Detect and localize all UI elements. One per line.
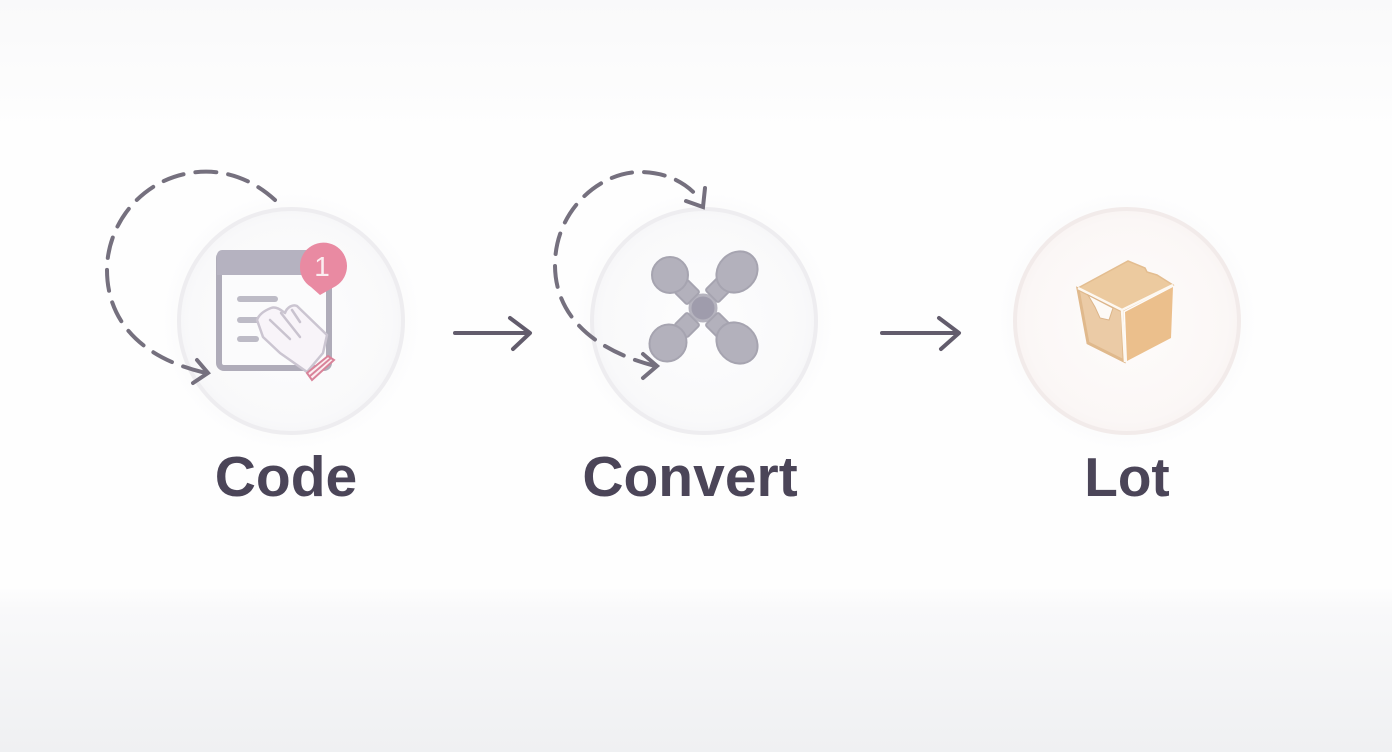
label: Lot: Lot [1084, 446, 1170, 508]
icon: cardboard box [1078, 261, 1173, 362]
icon: browser window [217, 250, 329, 368]
icon: notification badge [300, 243, 347, 295]
icon: notification badge: 1 [314, 251, 330, 282]
icon: four-lobed connector [642, 243, 766, 372]
arrow: Code to Convert [455, 318, 530, 349]
step: Code [107, 172, 431, 509]
circle: Lot [987, 181, 1267, 461]
icon: hand cursor [257, 305, 334, 380]
circle: Convert [564, 181, 844, 461]
arrow: Convert to Lot [882, 318, 959, 349]
arrow: dashed loop [555, 172, 705, 378]
step: Lot [987, 181, 1267, 508]
step: Convert [555, 172, 844, 509]
arrow: dashed loop [107, 172, 275, 383]
label: Convert: Convert [582, 445, 798, 509]
label: Code: Code [215, 445, 357, 509]
circle: Code [151, 181, 431, 461]
